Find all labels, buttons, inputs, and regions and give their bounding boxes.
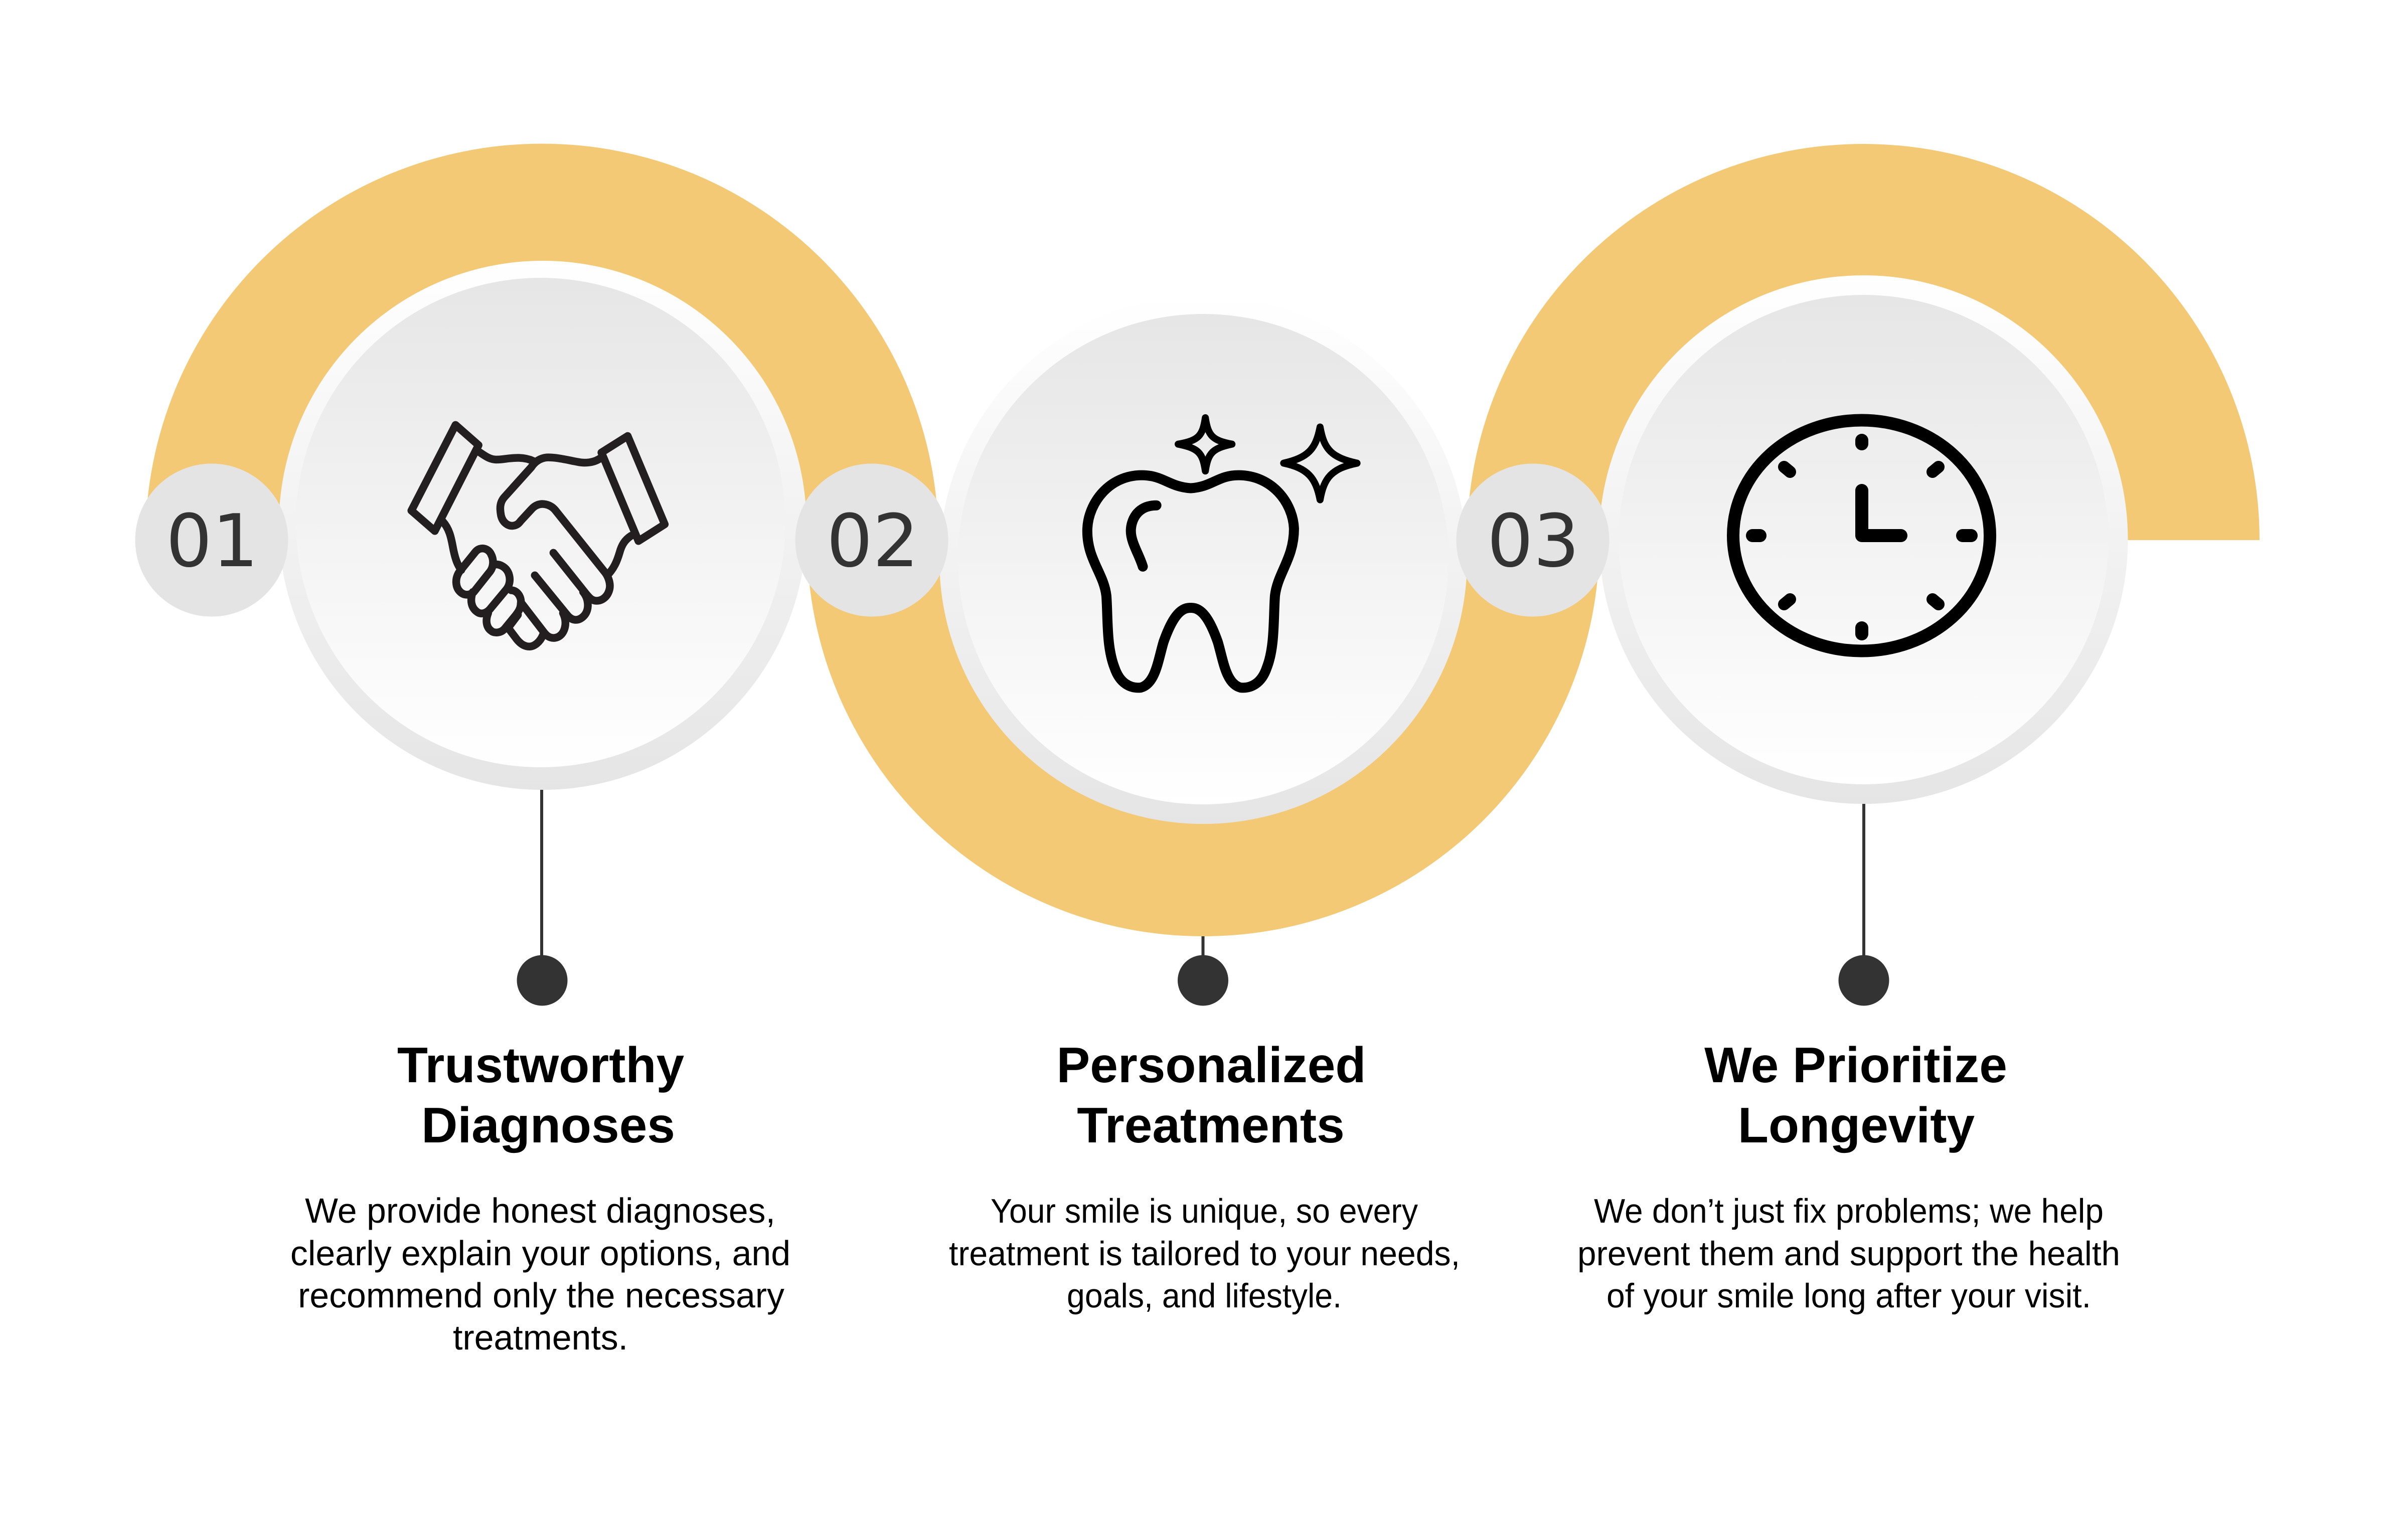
connector dot: step 1	[517, 955, 568, 1006]
text block: step 2 description	[949, 1192, 1460, 1315]
heading: Trustworthy Diagnoses	[397, 1037, 685, 1153]
number badge: 01: 01	[166, 499, 258, 584]
text block: step 1 description: treatments.	[453, 1318, 628, 1357]
panel: step 3	[1457, 275, 2128, 1315]
number badge: 02: 02	[827, 499, 919, 584]
icon: tooth with sparkles	[1087, 418, 1357, 688]
connector line: step 1	[540, 787, 543, 958]
connector dot: step 3	[1839, 955, 1889, 1006]
heading: We Prioritize Longevity: We Prioritize	[1704, 1037, 2007, 1093]
text block: step 3 description	[1577, 1192, 2120, 1315]
serpentine yellow ribbon	[145, 143, 2260, 936]
text block: step 1 description: We provide honest diagnoses,	[305, 1191, 775, 1230]
inner disc: step 1	[296, 278, 785, 767]
heading: We Prioritize Longevity	[1704, 1037, 2007, 1153]
connector dot: step 2	[1178, 955, 1228, 1006]
heading: Personalized Treatments: Treatments	[1077, 1097, 1345, 1153]
number badge: 03	[1457, 463, 1609, 617]
text block: step 2 description: Your smile is unique, so every	[991, 1192, 1418, 1230]
outer ring: step 1	[279, 261, 807, 790]
heading: Trustworthy Diagnoses: Diagnoses	[421, 1097, 675, 1153]
connector: step 2 line	[1202, 903, 1205, 958]
inner disc: step 2	[958, 314, 1449, 804]
text block: step 2 description: goals, and lifestyle.	[1067, 1277, 1342, 1315]
text block: step 1 description: clearly explain your options, and	[290, 1234, 790, 1273]
outer ring: step 3	[1599, 275, 2128, 804]
number badge: 01	[135, 463, 288, 617]
number badge: 02	[795, 463, 948, 617]
text block: step 2 description: treatment is tailored to your needs,	[949, 1235, 1460, 1273]
text block: step 3 description: prevent them and support the health	[1577, 1235, 2120, 1273]
heading: Personalized Treatments	[1057, 1037, 1366, 1153]
number badge: 03: 03	[1487, 499, 1579, 584]
outer ring: step 2	[939, 296, 1467, 824]
connector line: step 3	[1862, 801, 1865, 958]
text block: step 3 description: We don’t just fix problems; we help	[1594, 1192, 2104, 1230]
heading: Trustworthy Diagnoses: Trustworthy	[397, 1037, 685, 1093]
heading: We Prioritize Longevity: Longevity	[1738, 1097, 1975, 1153]
text block: step 3 description: of your smile long after your visit.	[1607, 1277, 2091, 1315]
inner disc: step 3	[1619, 295, 2109, 784]
text block: step 1 description: recommend only the necessary	[298, 1276, 784, 1315]
heading: Personalized Treatments: Personalized	[1057, 1037, 1366, 1093]
panel: step 2	[795, 296, 1467, 1315]
text block: step 1 description	[290, 1191, 790, 1357]
panel: step 1	[135, 261, 807, 1357]
icon: clock	[1733, 420, 1990, 651]
icon: handshake	[411, 425, 665, 646]
